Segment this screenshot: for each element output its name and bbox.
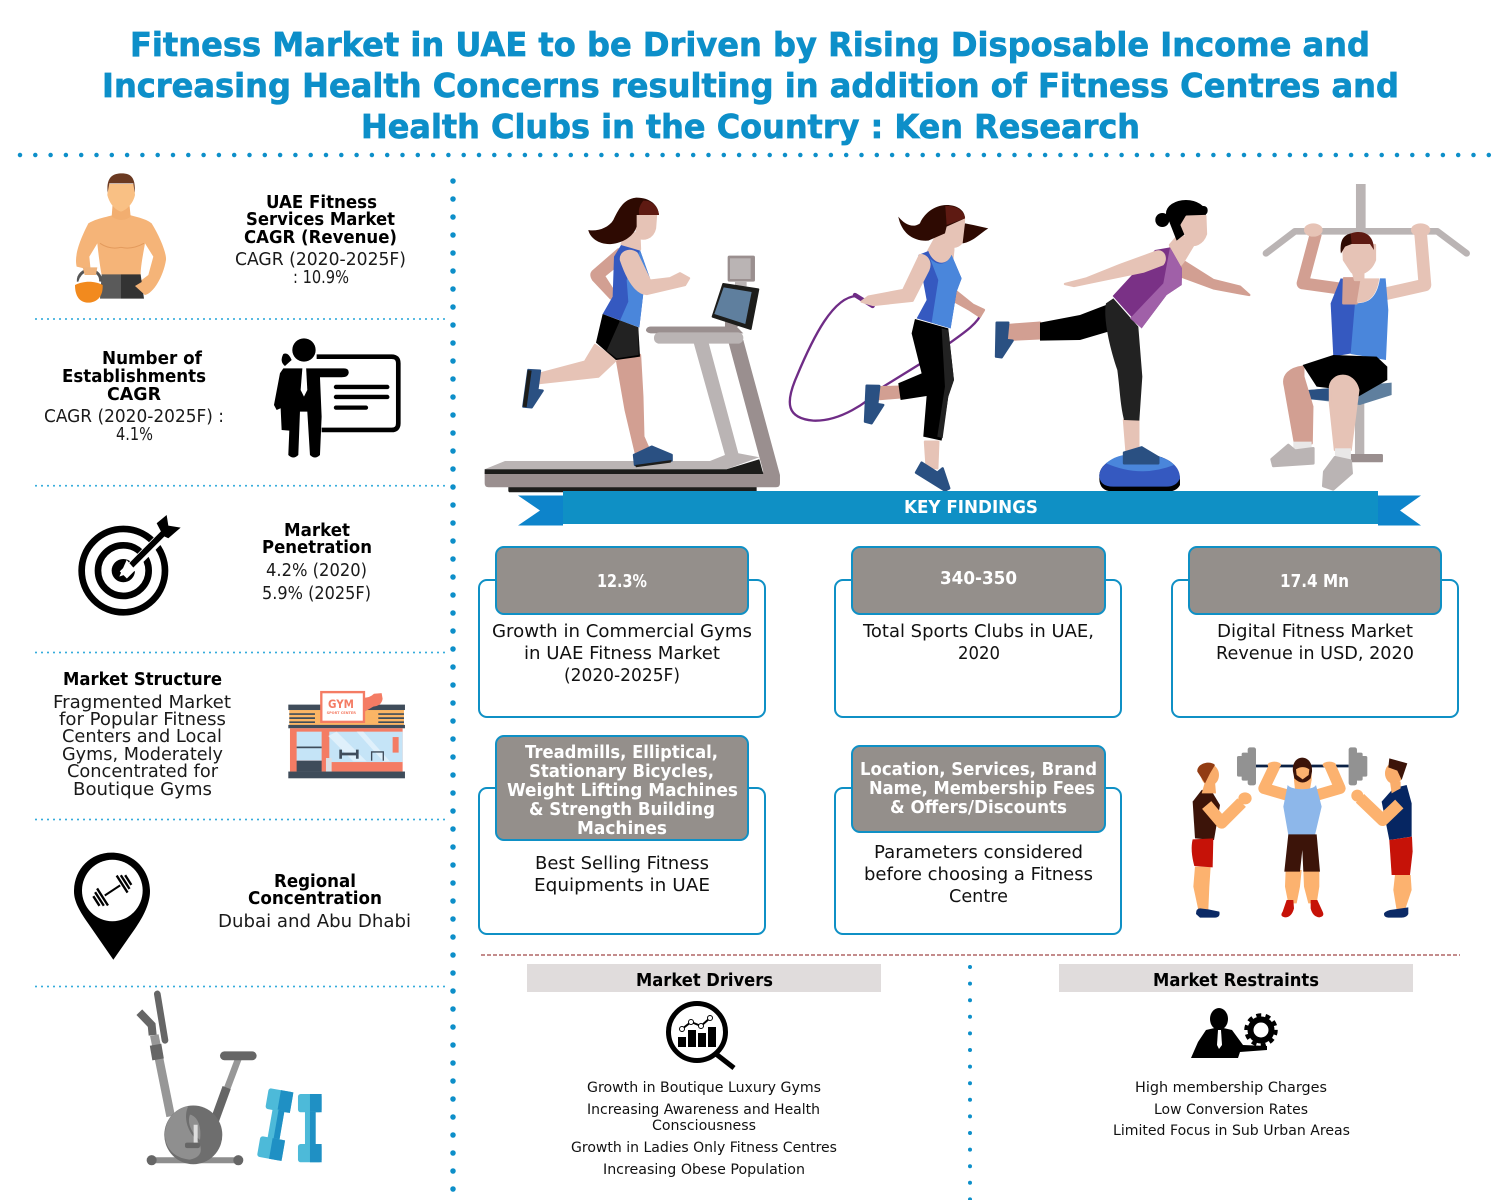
text: market structure: Concentrated for [67, 762, 219, 782]
text: UAE fitness services market CAGR: UAE Fitness [266, 193, 377, 213]
list: restraint items: Low Conversion Rates [1154, 1102, 1308, 1118]
title [102, 25, 1399, 146]
banner: key findings: KEY FINDINGS [904, 498, 1038, 518]
card: digital fitness revenue [1172, 547, 1458, 717]
illustration: treadmill runner [485, 198, 780, 492]
list: driver items: Increasing Awareness and Health [587, 1102, 820, 1118]
text: regional concentration [218, 872, 411, 932]
text: number of establishments CAGR: Number of [102, 349, 202, 369]
panel: market drivers [527, 964, 881, 1178]
card: total sports clubs [835, 547, 1121, 717]
text: market penetration: Penetration [262, 538, 372, 558]
list: driver items [571, 1080, 837, 1178]
card: best selling equipment: & Strength Building [529, 800, 715, 820]
card: fitness centre parameters: Name, Membership Fees [869, 779, 1095, 799]
text: market penetration: Market [284, 521, 350, 541]
text: UAE fitness services market CAGR: CAGR (Revenue) [244, 228, 397, 248]
icon: gym storefront [288, 692, 405, 778]
text: number of establishments CAGR: CAGR [107, 385, 162, 405]
card: fitness centre parameters: before choosing a Fitness [864, 864, 1093, 885]
title: Fitness Market in UAE to be Driven by Rising Disposable Income and [130, 25, 1370, 64]
text: market structure: Market Structure [63, 670, 222, 690]
icon: man with kettlebell [75, 173, 166, 303]
card: fitness centre parameters: Parameters considered [874, 842, 1083, 863]
list: restraint items: High membership Charges [1135, 1080, 1327, 1096]
text: market penetration: 5.9% (2025F) [262, 584, 371, 604]
card: total sports clubs: Total Sports Clubs in UAE, [862, 621, 1094, 642]
card: digital fitness revenue: Digital Fitness Market [1217, 621, 1413, 642]
icon: gym storefront: GYM [328, 698, 354, 711]
card: commercial gyms growth: 12.3% [597, 572, 647, 592]
icon: businessman with gear [1191, 1008, 1276, 1058]
text: market penetration: 4.2% (2020) [266, 561, 367, 581]
text: UAE fitness services market CAGR [235, 193, 406, 288]
illustration: woman with skipping rope [790, 205, 988, 491]
text: regional concentration: Dubai and Abu Dhabi [218, 912, 411, 932]
icon: blue dumbbells [257, 1088, 322, 1162]
panel: market drivers: Market Drivers [636, 971, 773, 991]
card: best selling equipment [479, 736, 765, 934]
card: fitness centre parameters [835, 746, 1121, 934]
card: total sports clubs: 340-350 [940, 569, 1017, 589]
text: market structure: Centers and Local [62, 727, 222, 747]
text: market structure: Gyms, Moderately [62, 745, 223, 765]
text: UAE fitness services market CAGR: Services Market [246, 210, 395, 230]
card: commercial gyms growth: Growth in Commercial Gyms [492, 621, 752, 642]
panel: left column key metrics [44, 173, 411, 1165]
banner: key findings [518, 491, 1421, 526]
icon: magnifier with chart [668, 1004, 734, 1068]
card: digital fitness revenue: Revenue in USD, 2020 [1216, 643, 1414, 664]
list: driver items: Growth in Boutique Luxury Gyms [587, 1080, 821, 1096]
title: Increasing Health Concerns resulting in addition of Fitness Centres and [102, 66, 1399, 105]
icon: target with arrow [82, 515, 181, 612]
icon: map pin with barbell [74, 853, 150, 960]
card: commercial gyms growth [479, 547, 765, 717]
list: restraint items: Limited Focus in Sub Urban Areas [1113, 1123, 1350, 1139]
text: market structure: for Popular Fitness [59, 710, 226, 730]
card: best selling equipment: Best Selling Fitness [535, 853, 709, 874]
illustration: three men with barbell [1192, 747, 1413, 918]
text: number of establishments CAGR: CAGR (2020-2025F) : [44, 407, 224, 427]
list: driver items: Growth in Ladies Only Fitness Centres [571, 1140, 837, 1156]
text: number of establishments CAGR: 4.1% [116, 425, 153, 445]
icon: gym storefront: SPORT CENTER [327, 711, 356, 715]
illustration: man on lat pulldown machine [1266, 184, 1467, 489]
card: best selling equipment: Equipments in UAE [534, 875, 710, 896]
text: market penetration [262, 521, 372, 604]
title: Health Clubs in the Country : Ken Research [361, 107, 1140, 146]
text: number of establishments CAGR: Establishments [62, 367, 206, 387]
text: regional concentration: Regional [274, 872, 356, 892]
card: digital fitness revenue: 17.4 Mn [1280, 572, 1349, 592]
text: market structure [53, 670, 231, 800]
text: regional concentration: Concentration [248, 889, 382, 909]
card: best selling equipment: Stationary Bicycles, [529, 762, 714, 782]
icon: presenter with board [274, 338, 398, 457]
text: UAE fitness services market CAGR: CAGR (2020-2025F) [235, 250, 406, 270]
card: fitness centre parameters: & Offers/Discounts [890, 798, 1067, 818]
illustration: woman balancing on bosu ball [996, 200, 1249, 492]
list: driver items: Consciousness [652, 1118, 756, 1134]
card: best selling equipment: Treadmills, Elliptical, [525, 743, 718, 763]
list: driver items: Increasing Obese Population [603, 1162, 805, 1178]
card: best selling equipment: Machines [577, 819, 667, 839]
panel: market restraints: Market Restraints [1153, 971, 1319, 991]
text: market structure: Boutique Gyms [73, 780, 212, 800]
text: number of establishments CAGR [44, 349, 224, 445]
list: restraint items [1113, 1080, 1350, 1139]
card: best selling equipment: Weight Lifting Machines [507, 781, 738, 801]
card: commercial gyms growth: (2020-2025F) [564, 665, 680, 686]
card: commercial gyms growth: in UAE Fitness Market [524, 643, 720, 664]
card: fitness centre parameters: Location, Services, Brand [860, 760, 1097, 780]
text: UAE fitness services market CAGR: : 10.9% [293, 268, 349, 288]
card: fitness centre parameters: Centre [949, 886, 1008, 907]
icon: exercise bike [139, 994, 257, 1165]
panel: market restraints [1059, 964, 1413, 1139]
card: total sports clubs: 2020 [958, 643, 1000, 664]
text: market structure: Fragmented Market [53, 693, 231, 713]
